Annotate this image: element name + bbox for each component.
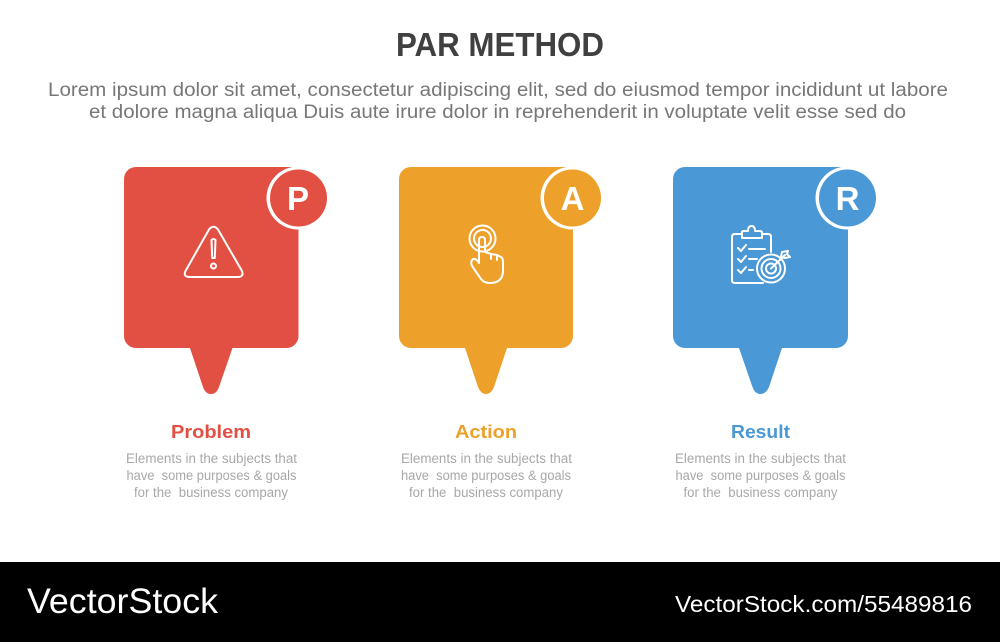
image url text: VectorStock.com/55489816 [675,591,972,617]
description: result: for the business company [684,485,838,500]
logo text: VectorStock [27,582,219,621]
description: result: Elements in the subjects that [675,451,846,466]
badge: R [816,166,878,230]
badge: R: R [836,180,860,217]
speech bubble: problem [124,167,298,394]
icon: tapping hand [470,226,503,283]
subtitle text block: Lorem ipsum dolor sit amet, consectetur adipiscing elit, sed do eiusmod tempor incididunt ut labore [48,80,948,101]
label: problem: Problem [171,422,251,442]
panel: result [673,166,878,500]
description: action: have some purposes & goals [401,468,571,483]
subtitle text block: et dolore magna aliqua Duis aute irure dolor in reprehenderit in voluptate velit esse sed do [89,102,906,123]
speech bubble: action [399,167,573,394]
description: action: Elements in the subjects that [401,451,572,466]
speech bubble: result [673,167,848,394]
badge: P [266,166,330,230]
description: action [401,451,572,500]
label: result: Result [731,422,790,442]
description: action: for the business company [409,485,563,500]
icon: warning triangle [185,227,243,277]
badge: A [540,166,604,230]
footer band [0,562,1000,642]
label: action: Action [455,422,517,442]
badge: P: P [287,180,309,217]
description: problem: for the business company [134,485,288,500]
badge: A: A [561,180,584,217]
description: problem: Elements in the subjects that [126,451,297,466]
panel: problem [124,166,330,500]
subtitle text block [48,80,948,123]
icon: checklist with target [732,226,790,283]
description: problem: have some purposes & goals [126,468,297,483]
description: problem [126,451,297,500]
title: PAR METHOD [396,26,604,63]
panel: action [399,166,604,500]
description: result: have some purposes & goals [676,468,846,483]
description: result [675,451,846,500]
